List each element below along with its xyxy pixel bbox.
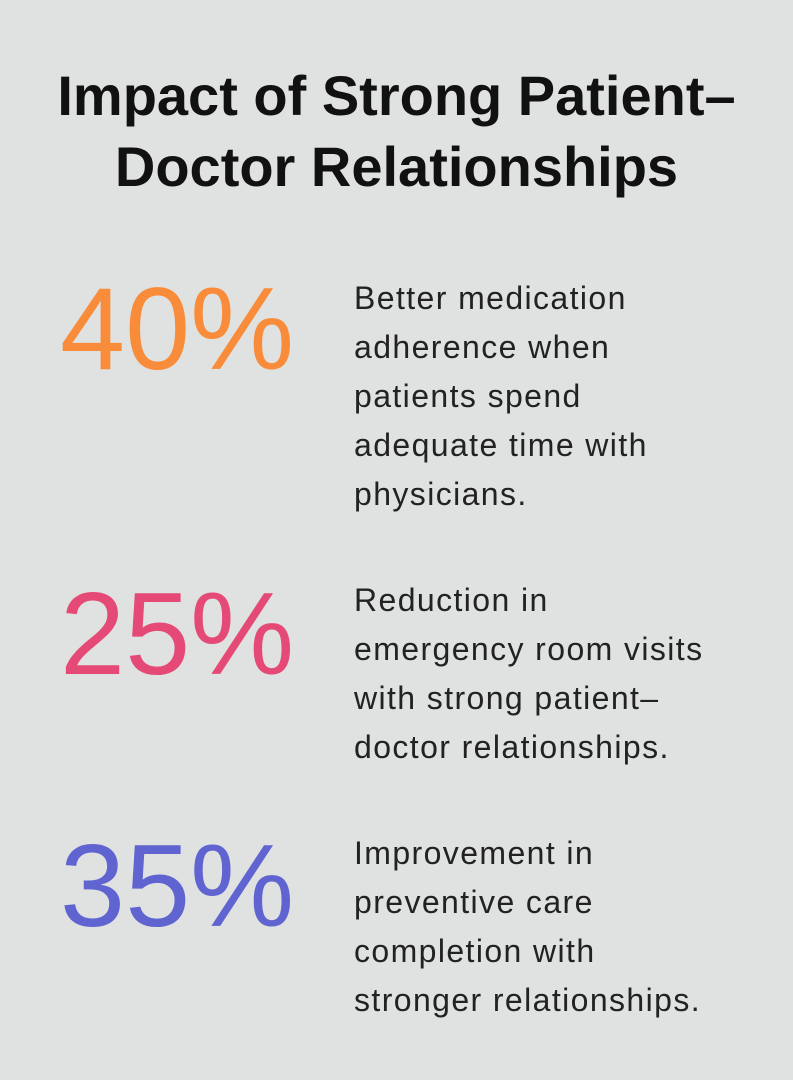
text: 40% description: patients spend: [354, 378, 582, 414]
text: 40% description: Better medication: [354, 280, 627, 316]
title: [57, 64, 736, 198]
text: 25% description: doctor relationships.: [354, 729, 670, 765]
text: 25% description: Reduction in: [354, 582, 549, 618]
stat: 40%: 40%: [60, 263, 294, 394]
text: 35% description: [354, 835, 701, 1018]
text: 40% description: [354, 280, 648, 512]
text: 35% description: preventive care: [354, 884, 594, 920]
text: 25% description: [354, 582, 704, 765]
text: 35% description: Improvement in: [354, 835, 594, 871]
text: 25% description: emergency room visits: [354, 631, 704, 667]
text: 40% description: physicians.: [354, 476, 528, 512]
title: Impact of Strong Patient–: [57, 64, 736, 127]
title: Doctor Relationships: [115, 135, 678, 198]
text: 40% description: adherence when: [354, 329, 610, 365]
stat: 35%: 35%: [60, 820, 294, 951]
text: 40% description: adequate time with: [354, 427, 648, 463]
text: 25% description: with strong patient–: [354, 680, 660, 716]
stat: 25%: 25%: [60, 568, 294, 699]
text: 35% description: stronger relationships.: [354, 982, 701, 1018]
text: 35% description: completion with: [354, 933, 596, 969]
